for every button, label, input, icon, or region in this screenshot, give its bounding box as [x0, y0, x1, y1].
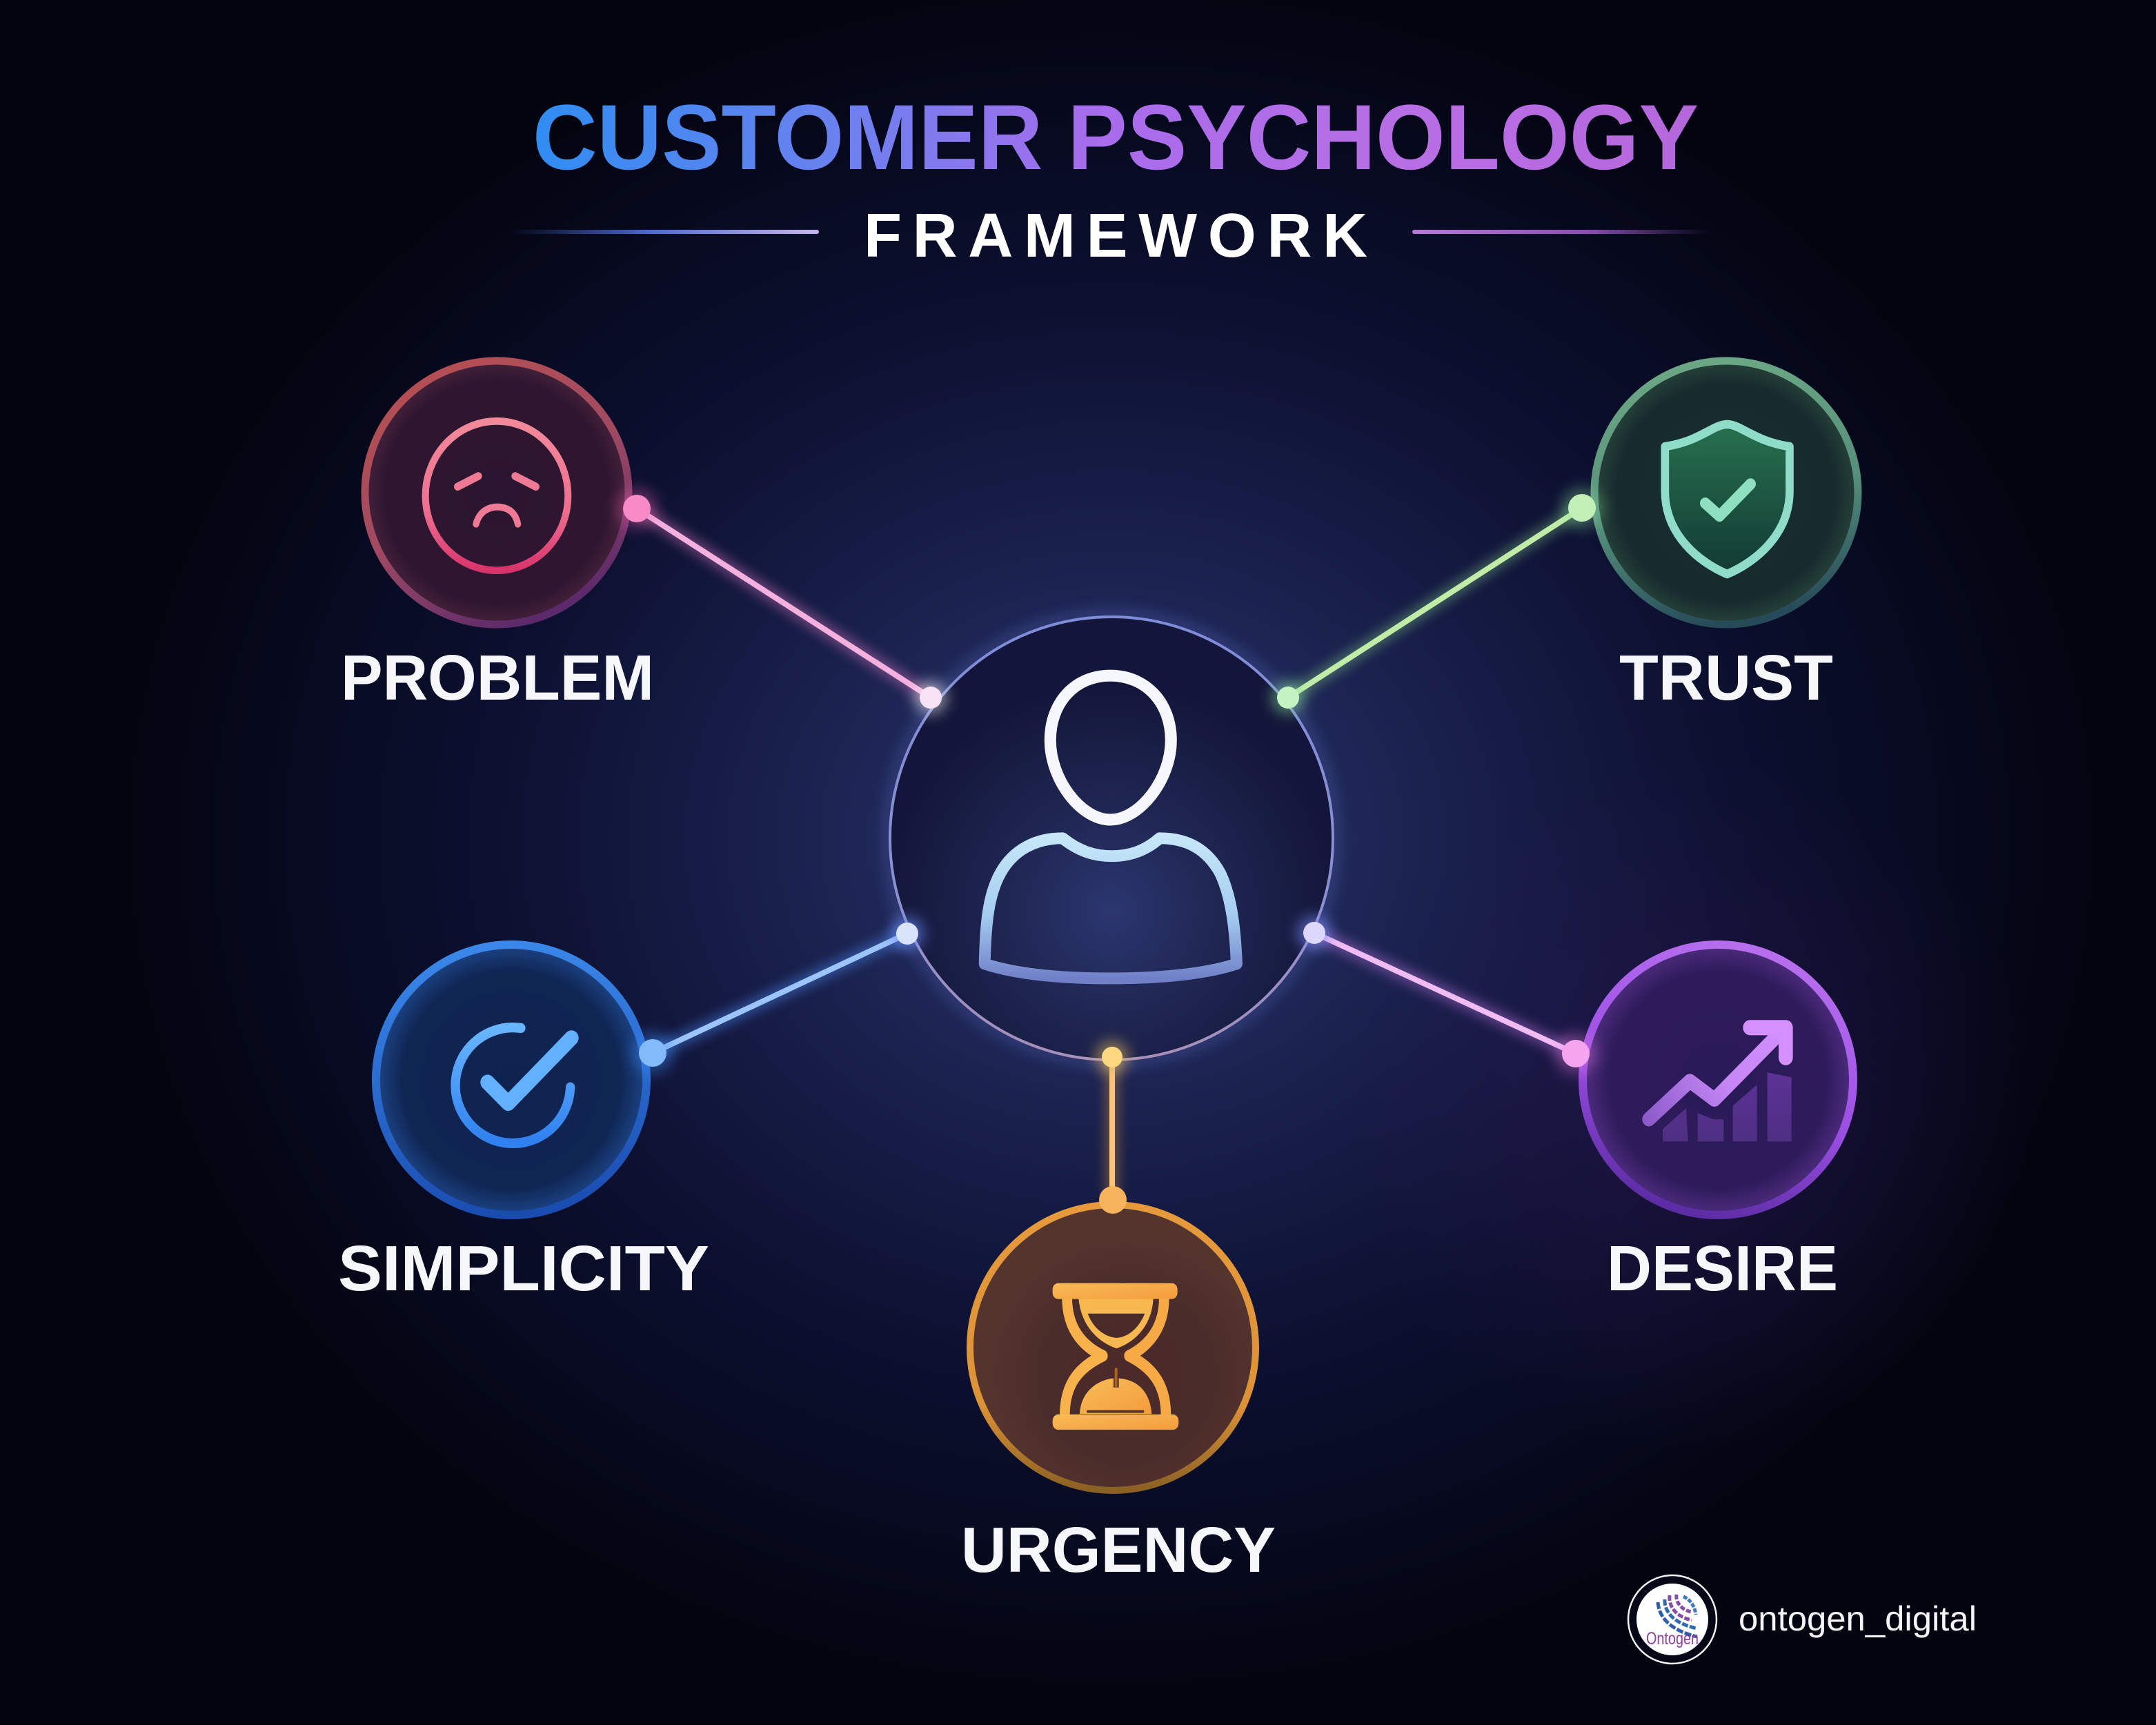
label: TRUST: TRUST [1619, 642, 1833, 713]
connector dots [616, 487, 1603, 1214]
label: SIMPLICITY: SIMPLICITY [338, 1232, 709, 1304]
label: DESIRE: DESIRE [1607, 1232, 1838, 1304]
icon: circled check [455, 1027, 571, 1143]
connector: urgency to centre [1107, 1057, 1118, 1200]
connector: desire to centre [1314, 933, 1576, 1054]
brand wordmark in logo: Ontogen [1646, 1629, 1699, 1648]
label: PROBLEM: PROBLEM [341, 642, 654, 713]
icon: sad face [426, 421, 568, 571]
title: CUSTOMER PSYCHOLOGY: CUSTOMER PSYCHOLOGY [533, 86, 1699, 189]
icon: shield with check [1665, 424, 1790, 574]
brand logo badge [1628, 1575, 1717, 1664]
connector: trust to centre [1288, 508, 1582, 698]
node: problem [341, 361, 654, 713]
node: simplicity [338, 945, 709, 1304]
label: URGENCY: URGENCY [961, 1514, 1276, 1586]
icon: person [985, 676, 1236, 978]
icon: hourglass [1053, 1283, 1178, 1430]
node: urgency [961, 1205, 1276, 1586]
subtitle: FRAMEWORK with side rules [511, 201, 1711, 270]
subtitle: FRAMEWORK with side rules: FRAMEWORK [864, 201, 1367, 270]
node: desire [1583, 945, 1853, 1304]
connector: problem to centre [637, 509, 931, 698]
brand handle: ontogen_digital [1739, 1599, 1977, 1638]
icon: ontogen swirl [1658, 1595, 1697, 1637]
icon: growth chart with arrow [1649, 1027, 1792, 1141]
connector: simplicity to centre [653, 934, 907, 1053]
central customer node [888, 615, 1335, 1062]
node: trust [1594, 361, 1858, 713]
